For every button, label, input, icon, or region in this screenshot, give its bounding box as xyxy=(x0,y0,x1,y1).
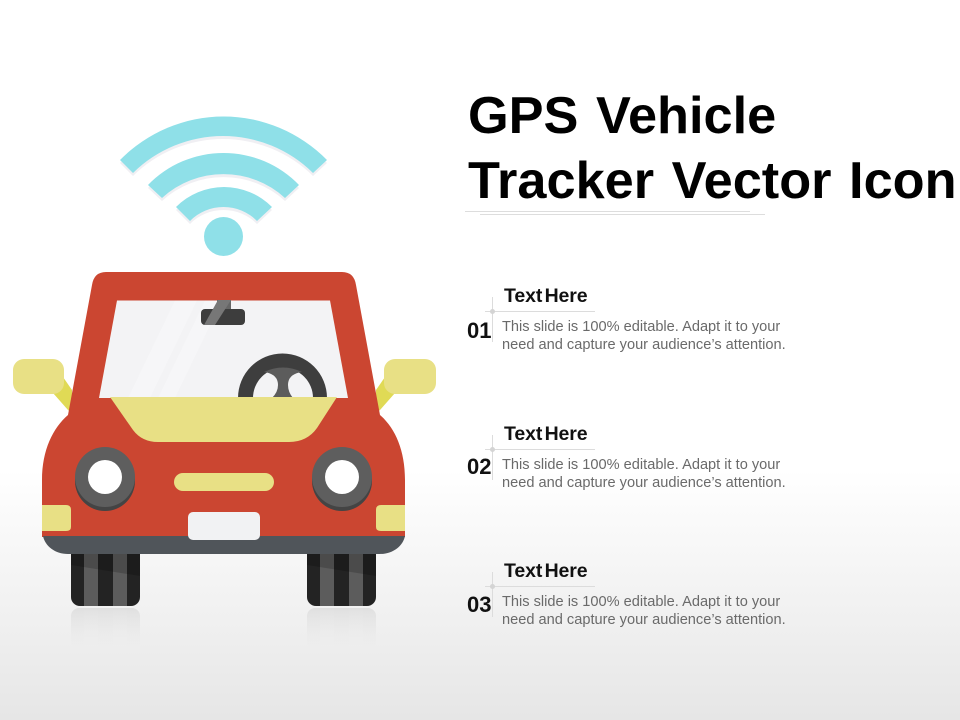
title xyxy=(468,87,957,210)
item 01 body: This slide is 100% editable. Adapt it to your xyxy=(502,319,780,335)
item 03 xyxy=(467,560,786,628)
item 02 body xyxy=(502,457,786,491)
item 02 heading: Text Here xyxy=(504,423,588,445)
title: Tracker Vector Icon xyxy=(468,152,957,210)
car body xyxy=(42,272,405,537)
title underline xyxy=(465,211,765,215)
icon: grille bar xyxy=(174,473,274,491)
icon: right front tyre xyxy=(307,540,376,606)
icon: left indicator xyxy=(42,505,71,531)
icon: tyre reflections xyxy=(71,608,376,650)
icon: bumper xyxy=(43,536,405,554)
title: GPS Vehicle xyxy=(468,87,776,145)
item 02 body: need and capture your audience’s attention. xyxy=(502,475,786,491)
icon: wifi signal xyxy=(120,117,327,256)
item 03 body: This slide is 100% editable. Adapt it to your xyxy=(502,594,780,610)
icon: steering wheel xyxy=(238,354,327,398)
icon: right mirror xyxy=(376,359,436,413)
icon: right indicator xyxy=(376,505,405,531)
illustration: connected car with wifi signal xyxy=(13,116,436,623)
icon: left headlight xyxy=(75,447,135,511)
icon: left mirror xyxy=(13,359,72,413)
item 01 xyxy=(467,285,786,353)
item 02 body: This slide is 100% editable. Adapt it to your xyxy=(502,457,780,473)
item 03 body: need and capture your audience’s attention. xyxy=(502,612,786,628)
icon: rear-view mirror xyxy=(201,300,245,325)
item 01 heading: Text Here xyxy=(504,285,588,307)
item 02 xyxy=(467,423,786,491)
item 01 number: 01 xyxy=(467,318,491,343)
item 01 body: need and capture your audience’s attention. xyxy=(502,337,786,353)
icon: hood xyxy=(110,397,337,442)
item 03 heading: Text Here xyxy=(504,560,588,582)
item 03 body xyxy=(502,594,786,628)
icon: number plate xyxy=(188,512,260,540)
item 01 body xyxy=(502,319,786,353)
item 03 number: 03 xyxy=(467,592,491,617)
windshield xyxy=(99,300,348,398)
icon: left front tyre xyxy=(71,540,140,606)
item 02 number: 02 xyxy=(467,454,491,479)
icon: right headlight xyxy=(312,447,372,511)
